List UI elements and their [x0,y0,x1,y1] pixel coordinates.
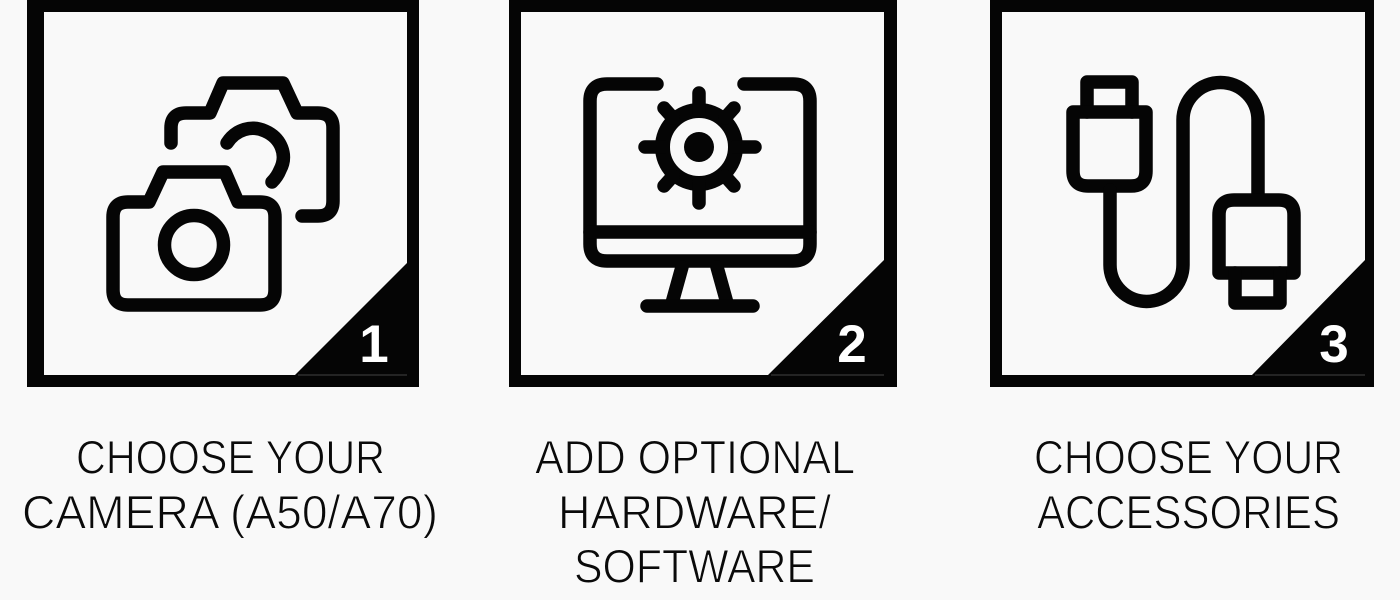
frame 1 with corner triangle [27,0,419,387]
caption: add optional hardware/software: ADD OPTIONAL [535,430,855,484]
panel: step 3 choose accessories [990,0,1374,387]
frame 3 with corner triangle [990,0,1374,387]
caption: choose your camera: CHOOSE YOUR [76,430,385,484]
caption: add optional hardware/software [535,430,855,592]
icon: usb cable [1073,82,1294,303]
icon: monitor with gear [590,84,810,306]
caption: choose your camera [22,430,438,538]
caption: choose your accessories: ACCESSORIES [1037,486,1340,538]
caption: choose your camera: CAMERA (A50/A70) [22,486,438,538]
panel: step 1 choose camera [27,0,419,387]
number 1: 1 [359,315,389,374]
caption: choose your accessories [1034,430,1343,538]
number 3: 3 [1319,315,1349,374]
caption: add optional hardware/software: HARDWARE/ [558,486,832,538]
number 2: 2 [837,315,867,374]
caption: add optional hardware/software: SOFTWARE [574,540,815,592]
frame 2 with corner triangle [509,0,897,387]
icon: two cameras [113,83,333,305]
caption: choose your accessories: CHOOSE YOUR [1034,430,1343,484]
panel: step 2 optional hardware and software [509,0,897,387]
